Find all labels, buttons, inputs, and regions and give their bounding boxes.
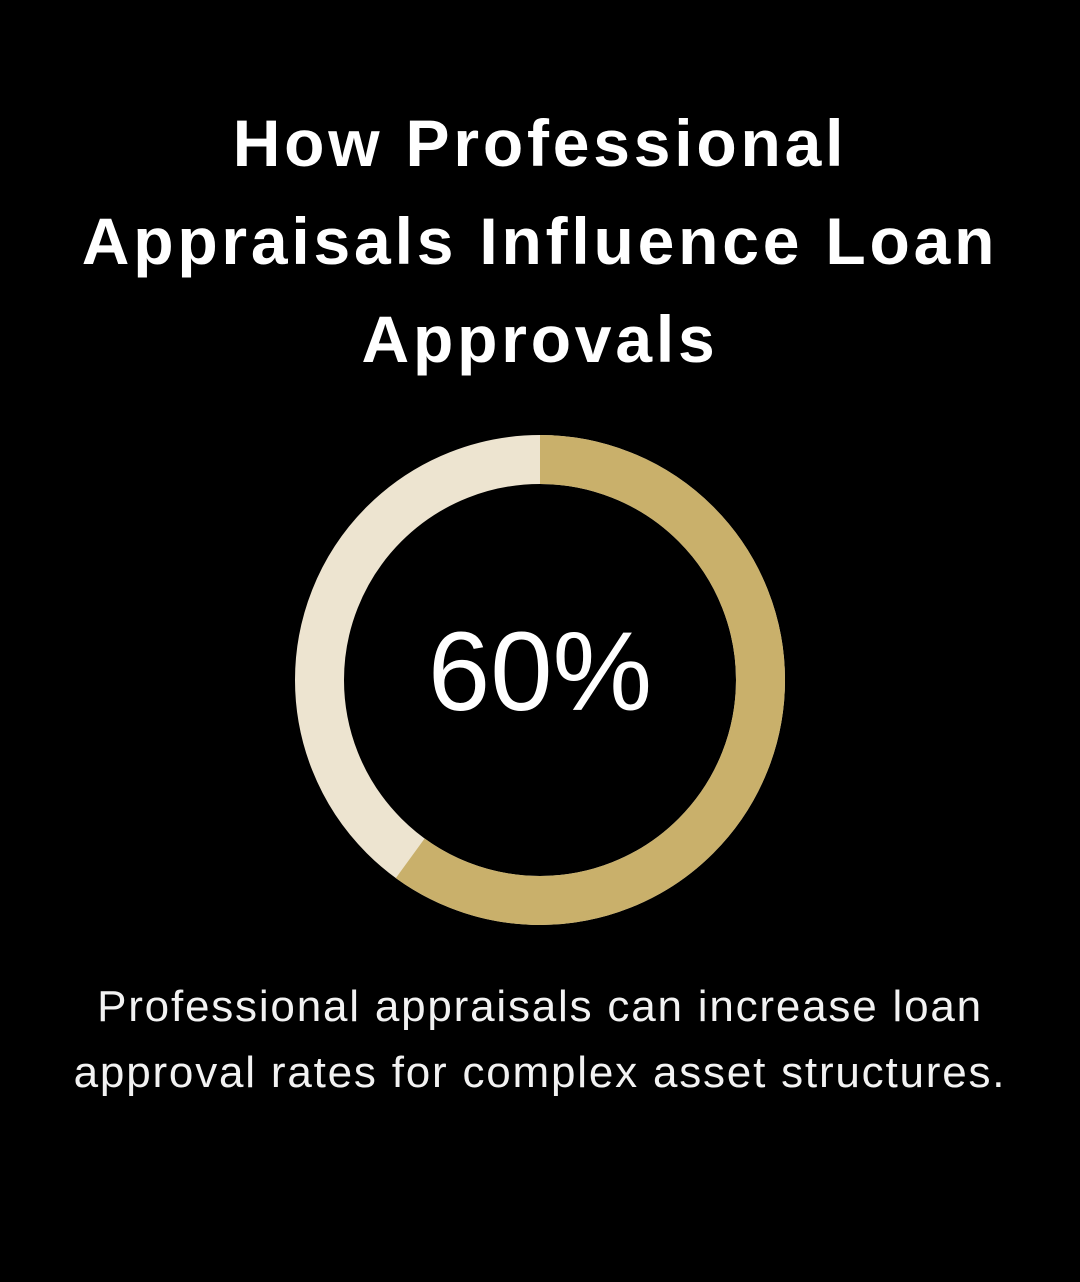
donut value arc 60% bbox=[320, 460, 760, 900]
donut track bbox=[320, 460, 760, 900]
title: Appraisals Influence Loan bbox=[82, 204, 998, 278]
title: How Professional bbox=[233, 106, 847, 180]
title bbox=[82, 106, 998, 376]
percentage label: 60% bbox=[428, 609, 652, 734]
description bbox=[74, 982, 1006, 1097]
description: approval rates for complex asset structures. bbox=[74, 1048, 1006, 1097]
description: Professional appraisals can increase loan bbox=[97, 982, 983, 1031]
title: Approvals bbox=[362, 302, 718, 376]
